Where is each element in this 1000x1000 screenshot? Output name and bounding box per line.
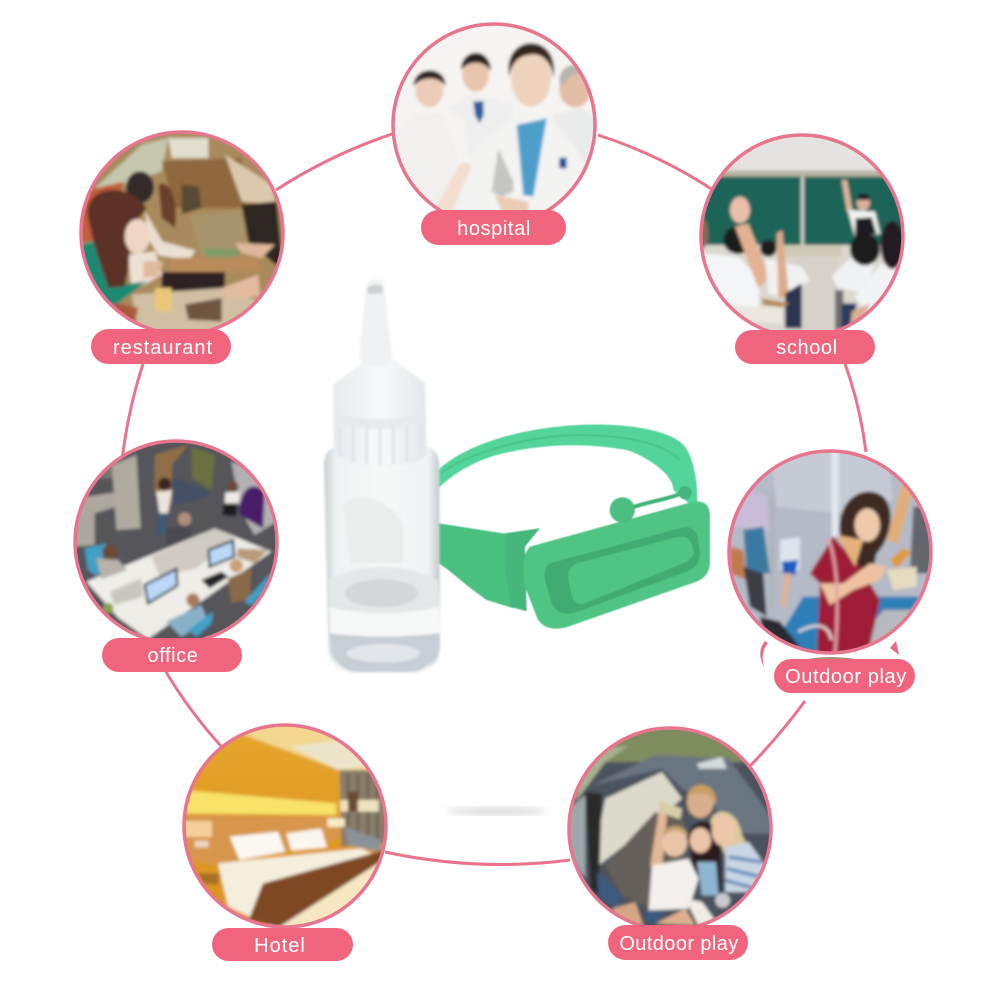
label: office: [102, 638, 242, 672]
accents beneath photo: [760, 641, 899, 667]
border: school: [701, 135, 903, 337]
photo: hospital: [395, 26, 594, 210]
label: school: [735, 330, 875, 364]
label: restaurant: [91, 329, 231, 364]
photo: outdoor play subway: [730, 452, 930, 652]
border: restaurant: [81, 132, 283, 334]
photo: camping: [570, 730, 770, 925]
label: restaurant: restaurant: [113, 337, 213, 359]
border: outdoor play subway: [729, 451, 931, 653]
photo: restaurant: [82, 134, 282, 329]
label: office: office: [147, 645, 199, 667]
label: outdoor play subway: [774, 659, 915, 693]
label: camping: [608, 925, 748, 960]
photo: hotel: [186, 726, 384, 926]
label: hotel: [212, 928, 353, 961]
label: hospital: hospital: [457, 218, 531, 240]
label: camping: Outdoor play: [619, 933, 739, 955]
border: hospital: [393, 24, 595, 226]
photo: office: [76, 442, 276, 638]
label: school: school: [776, 337, 838, 359]
connecting ring: [122, 134, 866, 864]
product: green wristband: [438, 425, 710, 629]
soft shadow under product: [447, 807, 547, 815]
label: outdoor play subway: Outdoor play: [785, 666, 907, 688]
product: clear bottle: [324, 279, 440, 672]
photo: school: [702, 136, 902, 330]
label: hospital: [421, 210, 566, 245]
label: hotel: Hotel: [254, 935, 306, 957]
border: hotel: [184, 725, 386, 927]
border: office: [75, 441, 277, 643]
border: camping: [569, 728, 771, 930]
